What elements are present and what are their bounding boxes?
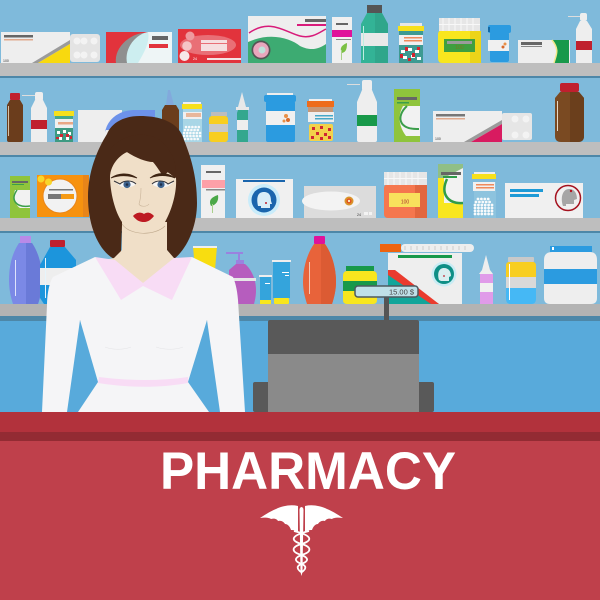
register side feet bbox=[253, 382, 434, 412]
white coat bbox=[42, 257, 245, 412]
box: white and yellow with blister: 100 bbox=[3, 59, 9, 63]
shelves bbox=[0, 63, 600, 321]
bottle: blue with white band bbox=[40, 240, 76, 304]
jar: yellow with green label: 100 bbox=[455, 45, 464, 51]
box: white and yellow with blister bbox=[1, 32, 100, 63]
bottle: orange bbox=[303, 236, 336, 304]
register body bbox=[268, 320, 419, 412]
bottle: blue with label bbox=[488, 25, 511, 62]
hair back bbox=[88, 116, 197, 259]
jar: orange lid mixed pills bbox=[307, 99, 334, 142]
jar: yellow lid red and white pills bbox=[54, 111, 74, 142]
box: white with head in red circle bbox=[505, 183, 583, 218]
bottle: brown with blue nozzle bbox=[162, 90, 179, 142]
lips bbox=[133, 213, 154, 222]
pharmacist bbox=[42, 116, 245, 412]
box: orange with round label bbox=[37, 175, 89, 217]
shelf 3 products bbox=[10, 164, 583, 218]
price display: 15.00 $ bbox=[389, 288, 415, 296]
box: red with capsules bbox=[178, 29, 241, 63]
box: white and green bbox=[518, 40, 570, 63]
dropper bottle: pink bbox=[479, 255, 493, 304]
bottle: green bbox=[361, 5, 388, 63]
shelf 4 products bbox=[9, 236, 597, 304]
icon: caduceus bbox=[260, 505, 343, 576]
box: red with capsules: 24 bbox=[193, 57, 197, 61]
staff bbox=[300, 507, 304, 576]
box: green and white with pink wave bbox=[248, 16, 326, 63]
box: white with blue head icon bbox=[236, 179, 293, 218]
pump bottle: purple bbox=[226, 252, 256, 304]
box: green top, yellow base with swirl bbox=[438, 164, 463, 218]
tube: small blue bbox=[259, 275, 272, 304]
bottle: large brown with red cap bbox=[555, 83, 584, 142]
shelf 1 products bbox=[1, 5, 592, 63]
thermometer bbox=[380, 244, 474, 252]
box: white and magenta with blister bbox=[433, 111, 532, 142]
hair fringe bbox=[110, 135, 176, 178]
cash register bbox=[253, 286, 434, 412]
register pole bbox=[384, 296, 389, 322]
bottle: periwinkle bbox=[9, 236, 42, 304]
blouse details bbox=[105, 347, 183, 349]
box: green and white swirl bbox=[10, 176, 30, 218]
box: white with teal head icon bbox=[388, 253, 462, 304]
pharmacy counter bbox=[0, 412, 600, 600]
shelf 2 products bbox=[7, 80, 584, 142]
spray bottle: red band bbox=[568, 13, 592, 63]
jar: orange with yellow label bbox=[384, 172, 427, 218]
serpents bbox=[294, 531, 309, 572]
right eye bbox=[150, 174, 175, 188]
box: white with pink band and leaf bbox=[201, 165, 225, 218]
right wing bbox=[305, 505, 343, 532]
box: red with pale blue curve bbox=[106, 32, 172, 63]
counter front bbox=[0, 441, 600, 600]
box: grey with white ellipse bbox=[302, 186, 376, 218]
neck bbox=[95, 222, 192, 290]
box: white with magenta band and leaf bbox=[332, 17, 352, 63]
jar: yellow lid white pills bbox=[182, 102, 202, 142]
bottle: yellow, grey and blue bbox=[506, 257, 536, 304]
title: PHARMACY bbox=[160, 442, 456, 501]
face bbox=[110, 152, 176, 235]
dropper bottle: green bbox=[236, 92, 249, 142]
box: grey with white ellipse: 24 bbox=[357, 213, 361, 217]
jar: blue with label bbox=[264, 93, 296, 142]
price display bbox=[355, 286, 418, 297]
cup: yellow bbox=[193, 246, 217, 270]
left wing bbox=[260, 505, 298, 532]
bottle: brown with red cap bbox=[7, 93, 23, 142]
jar: yellow with green band bbox=[343, 266, 377, 304]
jar: yellow with green label bbox=[438, 18, 481, 63]
tube: large blue bbox=[272, 260, 291, 304]
jar: yellow lid with white pills bbox=[472, 172, 496, 218]
jar: yellow lid with mixed pills bbox=[398, 23, 424, 63]
spray bottle: red band small bbox=[22, 92, 47, 142]
left eye bbox=[111, 174, 137, 188]
counter edge bbox=[0, 432, 600, 441]
jar: large white with blue band bbox=[544, 246, 597, 304]
spray bottle: green band bbox=[347, 80, 377, 142]
lower cabinet wall bbox=[0, 320, 600, 415]
box: white with blue curve bbox=[78, 110, 155, 142]
background wall bbox=[0, 0, 600, 320]
box: white and magenta with blister: 100 bbox=[435, 137, 441, 141]
chin line bbox=[122, 224, 165, 233]
box: light green with swirl bbox=[394, 89, 420, 142]
belt bbox=[98, 377, 188, 387]
bottle: yellow with grey band bbox=[209, 112, 228, 142]
collar bbox=[95, 257, 192, 300]
jar: orange with yellow label: 100 bbox=[401, 200, 409, 206]
counter top bbox=[0, 412, 600, 432]
nose bbox=[139, 188, 149, 206]
